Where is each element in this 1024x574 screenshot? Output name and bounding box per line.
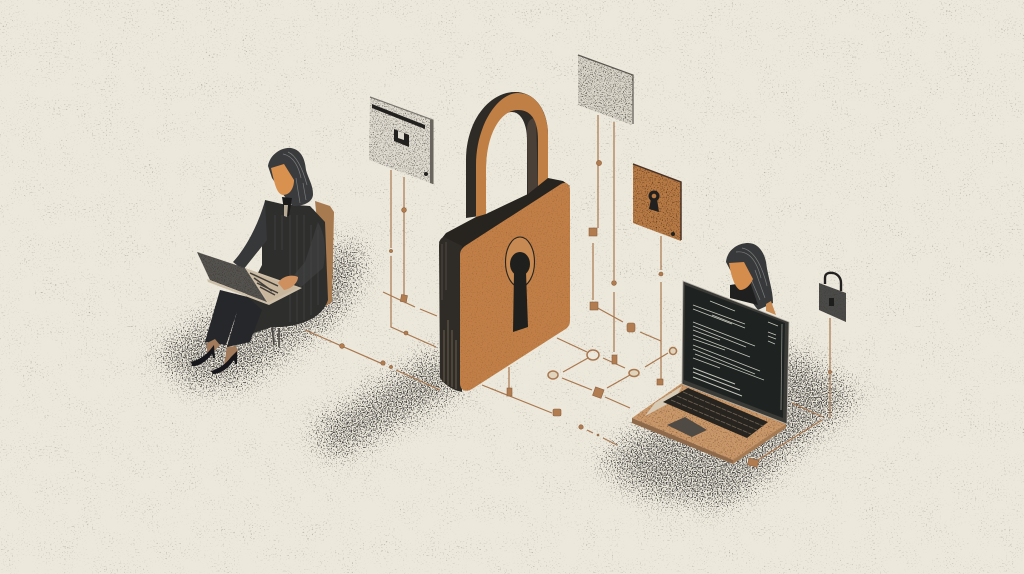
keyhole — [506, 237, 534, 332]
shoulder — [766, 301, 776, 315]
hair — [726, 243, 773, 310]
laptop lid — [197, 252, 270, 303]
person: right woman behind laptop — [726, 243, 776, 315]
ground shadows — [145, 232, 870, 512]
icon: small dark padlock — [819, 273, 846, 322]
person: left woman seated — [191, 148, 334, 374]
padlock — [439, 92, 570, 392]
torso — [730, 282, 758, 305]
shackle right inner — [527, 118, 538, 196]
far arm — [233, 201, 267, 270]
shoes — [191, 345, 215, 366]
garment stripes — [275, 215, 318, 322]
base — [632, 383, 786, 460]
hand — [278, 276, 298, 290]
card icon — [394, 129, 409, 147]
chair legs — [272, 326, 279, 347]
keyboard — [250, 273, 278, 295]
hair — [268, 148, 313, 206]
card: top blank — [578, 55, 633, 125]
connector lines — [305, 115, 830, 463]
torso and skirt — [244, 200, 328, 335]
connector rings — [548, 348, 676, 379]
legs — [205, 290, 262, 347]
lock top — [439, 178, 570, 250]
laptop base — [207, 268, 302, 305]
shackle front — [476, 93, 548, 224]
near sleeve — [294, 222, 325, 288]
terminal text lines — [693, 301, 778, 396]
face — [729, 262, 753, 290]
face — [271, 164, 294, 195]
keyhole icon — [648, 190, 660, 212]
ankles — [207, 339, 238, 365]
touchpad — [667, 417, 707, 437]
laptop: right terminal — [632, 281, 789, 464]
connector nodes — [340, 160, 832, 467]
card: left document — [369, 97, 433, 184]
collar — [282, 197, 292, 216]
chair — [315, 201, 334, 306]
screen — [682, 281, 789, 424]
lock side — [439, 237, 462, 392]
shackle side — [466, 92, 548, 218]
card bar — [372, 104, 425, 129]
keyboard — [663, 388, 768, 438]
card: orange keyhole — [633, 164, 681, 241]
lock front — [460, 183, 570, 391]
